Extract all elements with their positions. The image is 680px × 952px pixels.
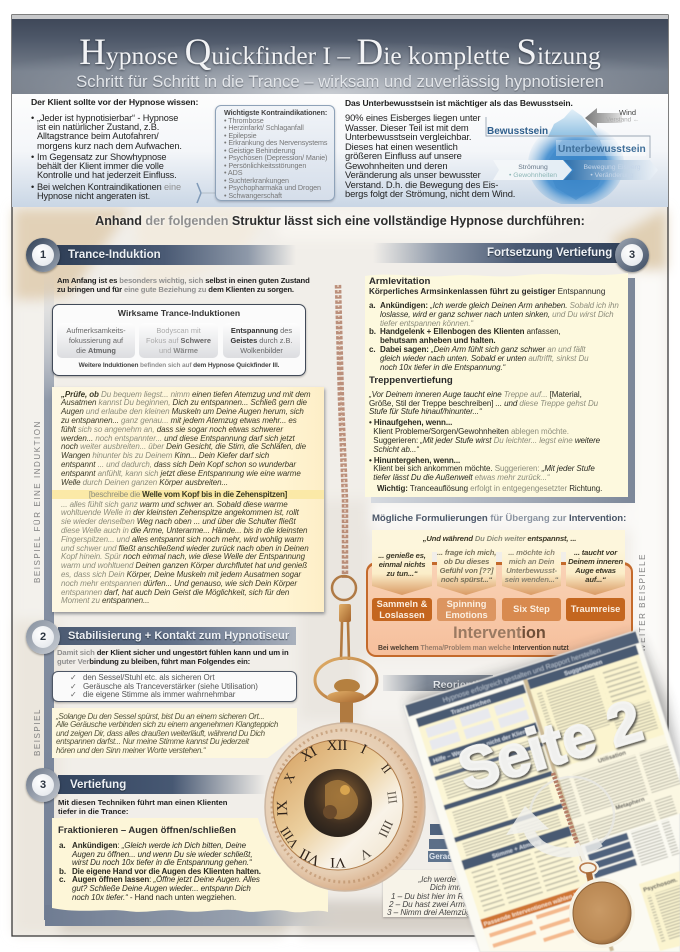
bullet list: Alltagstrance beim Autofahren/: [37, 131, 159, 141]
iceberg paragraph: 90% eines Eisberges liegen unter: [345, 112, 481, 123]
watch face: VIII: [277, 824, 302, 851]
wording 1: einmal nichts: [379, 560, 425, 569]
script part two: warm und wohltuend Deinen ganzen Körper durchflutet hat und genieß: [61, 561, 307, 570]
script part one: zu entspannen... ganz genau... mit jedem Atemzug etwas mehr... es: [61, 416, 297, 425]
script part two: wohltuende Welle in der kleinsten Zehenspitze angekommen ist, rollt: [61, 508, 299, 517]
bullet list: behält der Klient immer die volle: [37, 161, 164, 171]
technique step text: gut? Schließe Deine Augen wieder... entspann Dich: [72, 884, 251, 893]
watch face: III: [384, 790, 401, 805]
header band: [12, 15, 668, 94]
bullet list: morgens kurz nach dem Aufwachen.: [37, 141, 182, 151]
iceberg paragraph: Wasser. Dieser Teil ist mit dem: [345, 122, 469, 133]
bullet list: Kontrolle und hat jederzeit Einfluss.: [37, 170, 177, 180]
iceberg paragraph: Gewohnheiten und deren: [345, 160, 447, 171]
button Spinning: [437, 598, 496, 621]
stairs bullets: [369, 418, 600, 454]
sheet: left column: Trancezeichen: [450, 698, 492, 717]
stairs quote: Stufe für Stufe hinauf/hinunter...“: [369, 407, 482, 416]
script part one: fühlt sich so angenehm an, dass sie sogar noch etwas schwerer: [61, 425, 283, 434]
iceberg paragraph: Verstand. D.h. die Bewegung des Eis-: [345, 179, 498, 190]
bullet list: Im Gegensatz zur Showhypnose: [37, 152, 166, 162]
panel: induction script: [52, 387, 324, 612]
header title: Reorientierung: [433, 679, 508, 691]
quote box: 1 – Du bist hier im Raum: [391, 892, 479, 901]
badge 1: [26, 238, 60, 272]
option 3: Entspannung des: [231, 326, 292, 335]
wording 1: zu tun...“: [386, 569, 417, 578]
script part two: ... alles fühlt sich ganz warm und schwer an. Sobald diese warme: [61, 500, 288, 509]
bullet list: •: [31, 182, 34, 192]
chain: [332, 285, 356, 600]
box: checklist: [52, 671, 297, 702]
iceberg paragraph: bergs folgt der Strömung, nicht dem Wind.: [345, 188, 515, 199]
subheading levitation: Körperliches Armsinkenlassen führt zu geistiger Entspannung: [369, 287, 605, 296]
intervention label: Intervention: [453, 624, 546, 642]
sheet: right column: [527, 645, 680, 882]
stairs bullets: Schicht ab...“: [373, 445, 419, 454]
Seite 2 overlay label: Seite 2: [451, 688, 649, 803]
bullet list: •: [31, 113, 34, 123]
chain on sheet: [553, 773, 585, 862]
small gold watch: [569, 860, 635, 948]
iceberg paragraph: größeren Einfluss auf unsere: [345, 150, 462, 161]
intro text induction: [57, 276, 310, 294]
option 3: Geistes durch z.B.: [230, 336, 293, 345]
intro text stabilisation: guter Verbindung zu bleiben, führt man Folgendes ein:: [57, 657, 250, 666]
watch face: [265, 723, 425, 891]
sheet: left column: [416, 684, 591, 929]
script part two: Kopf hinein. Spür noch einmal nach, wie diese Welle der Entspannung: [61, 552, 305, 561]
option 2: Bodyscan mit: [156, 326, 201, 335]
watch face: XI: [298, 744, 320, 765]
contraindications text: Wichtigste Kontraindikationen:: [224, 108, 327, 117]
badge 2: [26, 620, 60, 654]
step bar 1: [430, 824, 490, 835]
wording 3: ... möchte ich: [508, 548, 555, 557]
script part one: entspannt ... und dadurch, dass sich Dein Kopf schon so wunderbar: [61, 460, 296, 469]
wording 2: ... frage ich mich,: [437, 548, 496, 557]
stairs quote: „Vor Deinem inneren Auge taucht eine Treppe auf... [Material,: [369, 390, 582, 399]
check marks: [70, 673, 77, 699]
script part two: und schwer und fließt anschließend wieder zurück nach oben in Deinen: [61, 544, 309, 553]
example text: entspannen darfst... Nur meine Stimme kannst Du jederzeit: [56, 737, 249, 746]
watch face: XII: [327, 738, 347, 754]
watch face: I: [358, 742, 369, 758]
box: contraindications: [215, 105, 335, 201]
bullet list: •: [31, 152, 34, 162]
checklist text: Geräusche als Tranceverstärker (siehe Utilisation): [83, 682, 258, 691]
panel: fractionation: [52, 818, 328, 912]
script part two: entspannen darf, hat auch Dein Geist die Möglichkeit, sich für den: [61, 588, 289, 597]
stairs quote: Größe, Stil der Treppe beschreiben] ... und diese Treppe gehst Du: [369, 399, 598, 408]
checklist text: die eigene Stimme als immer wahrnehmbar: [83, 690, 235, 699]
option 1: die Atmung: [76, 346, 116, 355]
script part two: sie wieder denselben Weg nach oben ... und über die Schulter fließt: [61, 517, 296, 526]
bullet list: „Jeder ist hypnotisierbar“ - Hypnose: [37, 113, 178, 123]
option 1: Aufmerksamkeits-: [66, 326, 126, 335]
wording 4: ... taucht vor: [574, 548, 617, 557]
levitation text: gleich wieder nach unten. Sobald er unten auftrifft, sinkst Du: [380, 354, 589, 363]
wording 3: [504, 548, 558, 584]
technique step text: wirst Du noch 10x tiefer in die Entspannung gehen.“: [72, 858, 252, 867]
sheet: intervention table: [483, 895, 609, 951]
contraindications text: • Herzinfarkt/ Schlaganfall: [224, 123, 304, 132]
orange base: [366, 562, 633, 657]
footnote: Weitere Induktionen befinden sich auf dem Hypnose Quickfinder III.: [79, 362, 279, 369]
wording 3: mich an Dein: [509, 557, 554, 566]
technique step text: Die eigene Hand vor die Augen des Klienten halten.: [72, 867, 261, 876]
heading: subconscious: Das Unterbewusstsein ist mächtiger als das Bewusstsein.: [345, 98, 573, 108]
title: Vertiefung: [70, 779, 126, 791]
title: Stabilisierung + Kontakt zum Hypnotiseur: [68, 630, 289, 642]
intro text deepening: tiefer in die Trance:: [58, 807, 128, 816]
script part one: Wangen hinunter bis zu Deinem Kinn... Dein Kiefer darf sich: [61, 451, 269, 460]
section 2 header: [24, 620, 296, 656]
intro text induction: zu bringen und für eine gute Beziehung zu dem Klienten zu sorgen.: [57, 285, 294, 294]
levitation markers: a.: [369, 301, 376, 310]
wording 4: auf...“: [585, 575, 606, 584]
example text: „Solange Du den Sessel spürst, bist Du an einem sicheren Ort...: [56, 712, 264, 720]
script part two: Moment zu entspannen...: [61, 596, 149, 605]
title: Trance-Induktion: [68, 249, 161, 261]
option 2: Fokus auf Schwere: [146, 336, 211, 345]
panel: stabilisation example: [52, 708, 297, 758]
intro text deepening: Mit diesen Techniken führt man einen Klienten: [58, 798, 227, 807]
badge 3: [615, 238, 649, 272]
wording 3: Unterbewusst-: [506, 566, 557, 575]
levitation text: Handgelenk + Ellenbogen des Klienten anfassen,: [380, 327, 561, 336]
header bar: [373, 243, 635, 263]
script part two: diese Welle auch in die Arme, Unterarme... Hände... bis in die kleinsten: [61, 526, 307, 535]
intro text stabilisation: Damit sich der Klient sicher und ungestört fühlen kann und um in: [57, 648, 289, 657]
watch face: X: [280, 770, 298, 786]
option 2: [139, 323, 218, 358]
wording 2: noch spürst...“: [441, 575, 492, 584]
script part one: entspannt anfühlt, kann sich jetzt diese Entspannung wie eine warme: [61, 469, 301, 478]
script part one: [60, 390, 311, 487]
stairs bullets descending: tiefer lässt Du die Außenwelt etwas mehr zurück...“: [373, 473, 549, 482]
stairs bullets: • Hinaufgehen, wenn...: [369, 418, 452, 427]
stairs bullets descending: • Hinuntergehen, wenn...: [369, 456, 460, 465]
sheet: right column: Suggestionen: [564, 660, 604, 677]
watch face: IIII: [376, 818, 397, 840]
badge 2: 2: [40, 631, 46, 643]
step bar 3: Gerade: [429, 852, 457, 861]
wording 4: [568, 548, 623, 584]
wording 1: ... genieße es,: [378, 551, 426, 560]
levitation text: [380, 301, 619, 372]
title: Hypnose Quickfinder I – Die komplette Sitzung: [79, 32, 601, 73]
quote box: „Ich werde Dich jetzt: [418, 875, 491, 884]
levitation markers: c.: [369, 345, 376, 354]
button Spinning: Spinning: [447, 598, 486, 608]
heading stairs: Treppenvertiefung: [369, 375, 453, 386]
technique step text: Augen zu öffnen... und wenn Du sie wieder schließt,: [72, 850, 252, 859]
contraindications text: • Psychopharmaka und Drogen: [224, 183, 321, 192]
contraindications text: • Epilepsie: [224, 131, 257, 140]
sheet: right column: Utilisation: [597, 750, 627, 765]
sheet: left column: Hilfe – Wenn etwas nicht der Klient...: [433, 727, 534, 765]
bullet list: Bei welchen Kontraindikationen eine: [37, 182, 181, 192]
levitation text: Ankündigen: „Ich werde gleich Deinen Arm anheben. Sobald ich ihn: [380, 301, 619, 310]
option 1: [57, 323, 135, 358]
stairs quote: [368, 390, 598, 416]
script part two: noch mehr entspannen dürfen... Und genauso, wie sich Dein Körper: [61, 579, 297, 588]
checklist text: [83, 673, 258, 699]
button Six Step: Six Step: [513, 604, 550, 614]
quote box: [383, 870, 491, 917]
script part one: Welle durch Deinen ganzen Körper ausbreiten...: [61, 478, 228, 487]
section 3 continued header: [378, 238, 650, 274]
levitation text: tiefer entspannen können.“: [380, 319, 473, 328]
iceberg diagram: Wind: [619, 108, 636, 117]
header bar: [58, 775, 266, 794]
panel shape: [365, 273, 628, 497]
section 1 header: [24, 238, 292, 274]
bullet list: ist ein natürlicher Zustand, z.B.: [37, 122, 159, 132]
watch face: VII: [297, 845, 323, 868]
contraindications text: • Schwangerschaft: [224, 191, 282, 200]
button Traumreise: Traumreise: [571, 604, 620, 614]
script part one: noch weiter ausbreiten... über Dein Gesicht, die Stirn, die Schläfen, die: [61, 442, 306, 451]
header bar: [58, 627, 296, 645]
iceberg diagram: Unterbewusstsein: [558, 144, 646, 155]
example text: und zeigen Dir, dass alles draußen weiterläuft, während Du Dich: [56, 729, 265, 738]
bullet list: Hypnose nicht angeraten ist.: [37, 191, 150, 201]
sheet: left column: Stimme + Atmung: [491, 839, 542, 860]
check marks: ✓: [70, 690, 77, 699]
panel: information before hypnosis: [12, 94, 668, 207]
icon: turn-page arrow: [506, 777, 614, 853]
panel: reorientation: [383, 675, 493, 917]
example text: hören und den Sinn meiner Worte verstehen.“: [56, 746, 205, 755]
option 3: Wolkenbilder: [240, 346, 283, 355]
panel: intervention: [366, 530, 633, 657]
panel title: Wirksame Trance-Induktionen: [118, 308, 240, 318]
contraindications text: • Erkrankung des Nervensystems: [224, 138, 327, 147]
sheet: psychosomatic block: Psychosom.: [643, 877, 679, 894]
stairs bullets: Klient Probleme/Sorgen/Gewohnheiten ablegen möchte.: [373, 427, 569, 436]
contraindications text: • ADS: [224, 168, 242, 177]
script part one: Ausatmen kannst Du beginnen, Dich zu entspannen... Schließ gern die: [61, 398, 307, 407]
iceberg diagram: Verstand ←: [606, 116, 639, 124]
cream arrows: [372, 530, 625, 595]
sheet: right column: Metaphern: [615, 797, 646, 812]
iceberg diagram: Bewusstsein: [487, 126, 548, 137]
bullet list: [31, 113, 182, 201]
panel shadow: [371, 278, 635, 503]
levitation markers: b.: [369, 327, 376, 336]
heading levitation: Armlevitation: [369, 276, 430, 287]
example text: Alle Geräusche verbinden sich zu einem angenehmen Klangteppich: [56, 720, 278, 729]
stairs bullets descending: Klient bei sich ankommen möchte. Suggerieren: „Mit jeder Stufe: [373, 464, 595, 473]
panel shape: [52, 818, 328, 912]
technique step text: Ankündigen: „Gleich werde ich Dich bitten, Deine: [72, 841, 246, 850]
technique steps: a.: [59, 841, 66, 850]
sheet: left column: Passende Interventionen wählen bei...: [483, 889, 588, 928]
sheet: psychosomatic block: [639, 871, 680, 951]
vertical label: example: BEISPIEL: [33, 708, 42, 756]
lead-in quote: „Und während Du Dich weiter entspannst, ...: [423, 534, 576, 543]
heading: client should know: Der Klient sollte vor der Hypnose wissen:: [31, 97, 198, 107]
iceberg diagram: Bewegung Eisberg: [583, 164, 641, 171]
wording 2: [437, 548, 496, 584]
header bar: [383, 675, 493, 691]
levitation text: behutsam anheben und halten.: [380, 336, 496, 345]
script part one: Augen und erlaube den kleinen Muskeln um Deine Augen herum, sich: [61, 407, 304, 416]
button Sammeln: [372, 598, 432, 621]
technique step text: [72, 841, 261, 902]
iceberg diagram: • Veränderung: [590, 172, 634, 179]
checklist text: den Sessel/Stuhl etc. als sicheren Ort: [83, 673, 214, 682]
check marks: ✓: [70, 682, 77, 691]
script part two: [61, 500, 309, 605]
quote box: 3 – Nimm drei Atemzüge: [387, 908, 475, 917]
quote box: Dich immer mehr: [430, 883, 491, 892]
contraindications text: • Persönlichkeitsstörungen: [224, 161, 306, 170]
watch face: II: [378, 761, 394, 776]
intro text deepening: [58, 798, 227, 816]
levitation markers: [369, 301, 376, 354]
heading: transition wording: Mögliche Formulierungen für Übergang zur Intervention:: [372, 513, 626, 524]
iceberg diagram: • Gewohnheiten: [509, 172, 557, 179]
subtitle: Schritt für Schritt in die Trance – wirksam und zuverlässig hypnotisieren: [76, 72, 604, 91]
technique step text: Augen öffnen lassen: „Öffne jetzt Deine Augen. Alles: [72, 875, 260, 884]
sheet: [403, 630, 680, 952]
step bar 3: [428, 851, 489, 862]
quote box: 2 – Du hast zwei Arme: [389, 900, 469, 909]
technique step text: noch 10x tiefer.“ - Hand nach unten wegziehen.: [72, 893, 236, 902]
technique steps: [59, 841, 66, 884]
technique title: Fraktionieren – Augen öffnen/schließen: [58, 825, 236, 836]
iceberg paragraph: Unterbewusstsein vergleichbar.: [345, 131, 471, 142]
iceberg paragraph: [345, 112, 515, 199]
levitation text: loslasse, wird er ganz schwer nach unten sinken, und Du wirst Dich: [380, 310, 614, 319]
button Sammeln: Loslassen: [379, 610, 425, 620]
highlighted instruction: [beschreibe die Welle vom Kopf bis in die Zehenspitzen]: [89, 490, 287, 499]
wording 4: Deinem inneren: [568, 557, 623, 566]
option 1: fokussierung auf: [69, 336, 123, 345]
wording 2: Gefühl von [??]: [440, 566, 493, 575]
intervention footnote: Bei welchem Thema/Problem man welche Intervention nutzt: [378, 645, 569, 652]
contraindications text: • Suchterkrankungen: [224, 176, 289, 185]
iceberg paragraph: Veränderung als unser bewusster: [345, 169, 481, 180]
option 2: und Wärme: [159, 346, 198, 355]
contraindications text: • Geistige Behinderung: [224, 146, 295, 155]
wording 2: ob Du dieses: [444, 557, 489, 566]
title: Fortsetzung Vertiefung: [487, 247, 612, 259]
contraindications text: • Thrombose: [224, 116, 264, 125]
section 3 header: [24, 768, 262, 804]
section heading: Anhand der folgenden Struktur lässt sich eine vollständige Hypnose durchführen:: [95, 214, 585, 228]
panel: effective inductions: [52, 304, 306, 376]
badge 3: 3: [40, 779, 46, 791]
contraindications text: [224, 108, 328, 200]
iceberg diagram: Strömung: [518, 164, 548, 171]
header bar: [56, 245, 296, 265]
script part two: es, dass sich Dein Körper, Deine Muskeln mit jedem Ausatmen sogar: [61, 570, 301, 579]
intro text stabilisation: [57, 648, 289, 666]
connector chevron: [196, 182, 215, 204]
stairs bullets: Suggerieren: „Mit jeder Stufe wirst Du leichter... legst eine weitere: [373, 436, 600, 445]
check marks: ✓: [70, 673, 77, 682]
watch face: VI: [330, 854, 346, 870]
watch stem and bow: [315, 604, 377, 723]
badge 3: [26, 768, 60, 802]
technique steps: c.: [59, 875, 66, 884]
example text: [56, 713, 278, 753]
button Traumreise: [566, 598, 625, 621]
wording 1: [378, 551, 426, 578]
sheet: Hypnose erfolgreich gestalten und Rapport herstellen: [442, 647, 602, 704]
important note: Wichtig: Tranceauflösung erfolgt in entgegengesetzter Richtung.: [377, 484, 602, 493]
vertical label: induction example: BEISPIEL FÜR EINE INDUKTION: [33, 421, 42, 583]
wording 4: Auge etwas: [575, 566, 616, 575]
wording 3: sein wenden...“: [505, 575, 558, 584]
panel: arm levitation and stairs: [365, 273, 635, 503]
iceberg diagram: [486, 108, 650, 204]
script part one: werden... noch entspannter... und diese Entspannung darf sich jetzt: [61, 434, 295, 443]
step bar 2: [429, 839, 489, 849]
stairs bullets descending: [369, 456, 595, 482]
button Spinning: Emotions: [445, 610, 488, 620]
option 3: [223, 323, 300, 358]
script part two: Fingerspitzen... und alles entspannt sich noch mehr, wird wohlig warm: [61, 535, 304, 544]
vertical label: further examples: WEITER BEISPIELE: [638, 553, 647, 652]
badge 3: 3: [629, 249, 635, 261]
iceberg paragraph: Dieses hat einen wesentlich: [345, 141, 458, 152]
technique steps: b.: [59, 867, 66, 876]
badge 1: 1: [40, 249, 46, 261]
contraindications text: • Psychosen (Depression/ Manie): [224, 153, 327, 162]
levitation text: Dabei sagen: „Dein Arm fühlt sich ganz schwer an und fällt: [380, 345, 585, 354]
watch face: V: [357, 844, 373, 862]
levitation text: noch 10x tiefer in die Entspannung.“: [380, 363, 505, 372]
intro text induction: Am Anfang ist es besonders wichtig, sich selbst in einen guten Zustand: [57, 276, 310, 285]
button Six Step: [502, 598, 561, 621]
button Sammeln: Sammeln &: [377, 598, 427, 608]
watch face: IX: [275, 800, 291, 817]
script part one: „Prüfe, ob Du bequem liegst... nimm einen tiefen Atemzug und mit dem: [61, 390, 311, 399]
